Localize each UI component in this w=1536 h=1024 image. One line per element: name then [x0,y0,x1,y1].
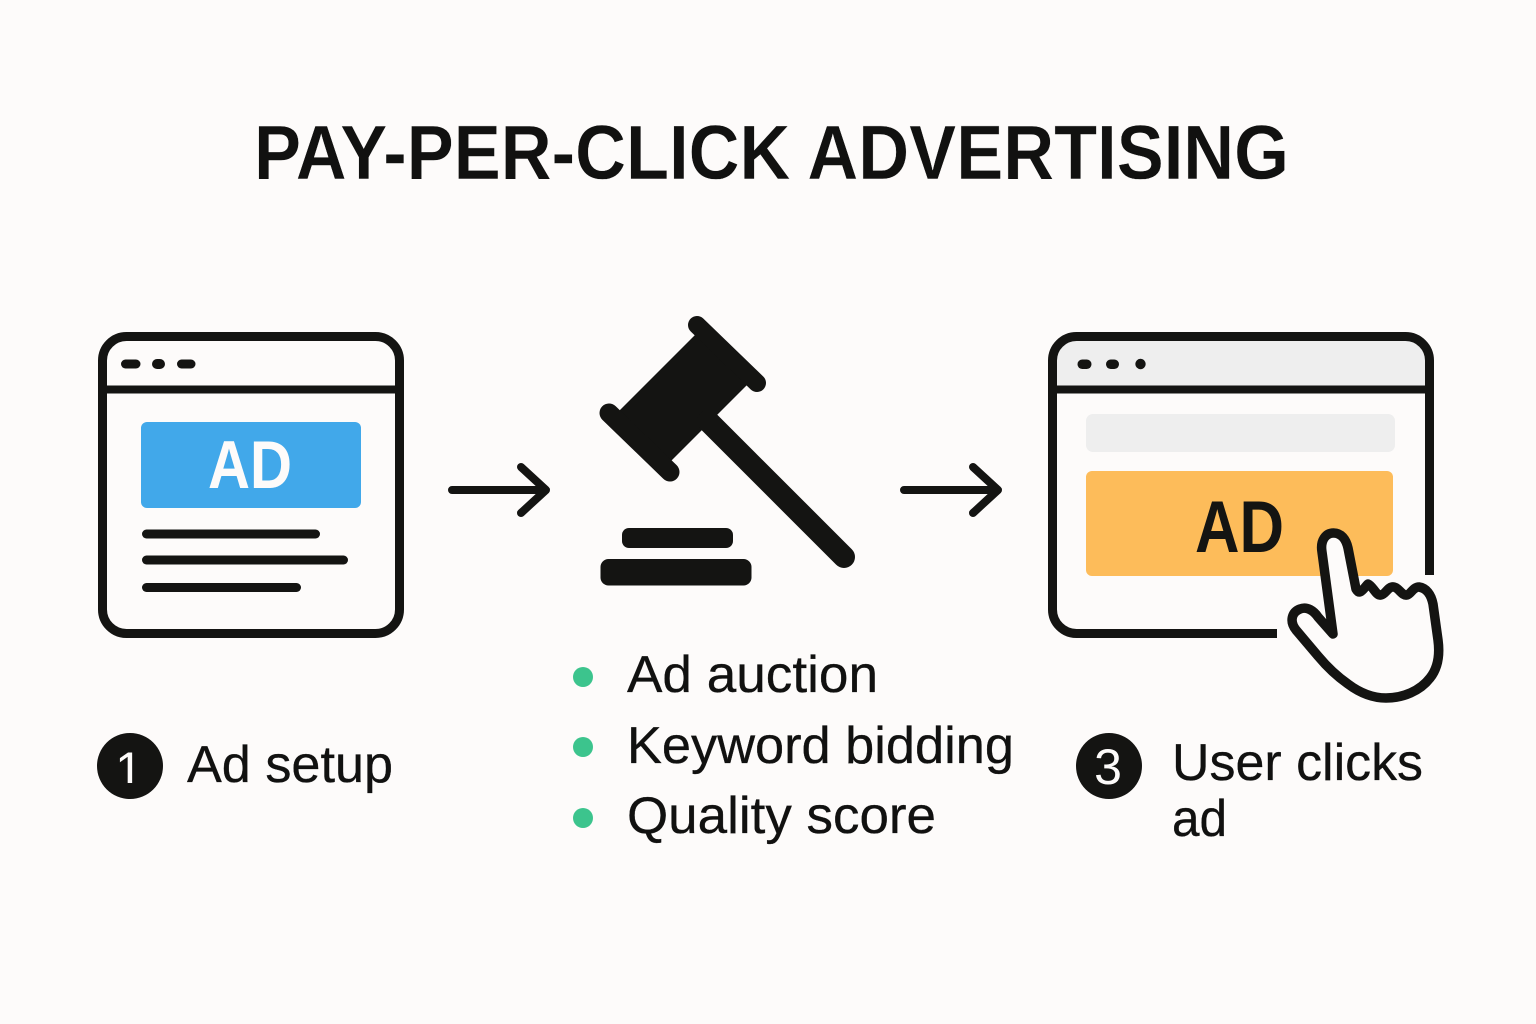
icon: clicking hand [1292,533,1439,698]
panel: step 3 user clicks browser [1052,336,1430,634]
step 1 label: Ad setup [187,736,393,794]
arrow: auction to step 3 [904,467,998,513]
step 1 label [97,733,393,799]
step 1 number badge [97,733,163,799]
auction bullet list: Quality score [627,787,936,845]
orange ad banner [1086,471,1393,576]
step 3 label: ad [1172,790,1227,848]
panel: step 1 ad setup browser [102,336,400,634]
step 3 label [1076,733,1423,848]
step 3 number badge: 3 [1094,739,1122,795]
arrow: step 1 to auction [452,467,546,513]
orange ad banner: AD [1195,487,1284,568]
title: PAY-PER-CLICK ADVERTISING [254,110,1289,196]
step 1 number badge: 1 [115,742,143,798]
icon: gavel [600,325,844,586]
blue ad banner: AD [208,427,292,503]
step 3 number badge [1076,733,1142,799]
blue ad banner [141,422,361,508]
auction bullet list: Ad auction [627,646,878,704]
auction bullet list [573,646,1014,845]
auction bullet list: Keyword bidding [627,717,1014,775]
step 3 label: User clicks [1172,734,1423,792]
